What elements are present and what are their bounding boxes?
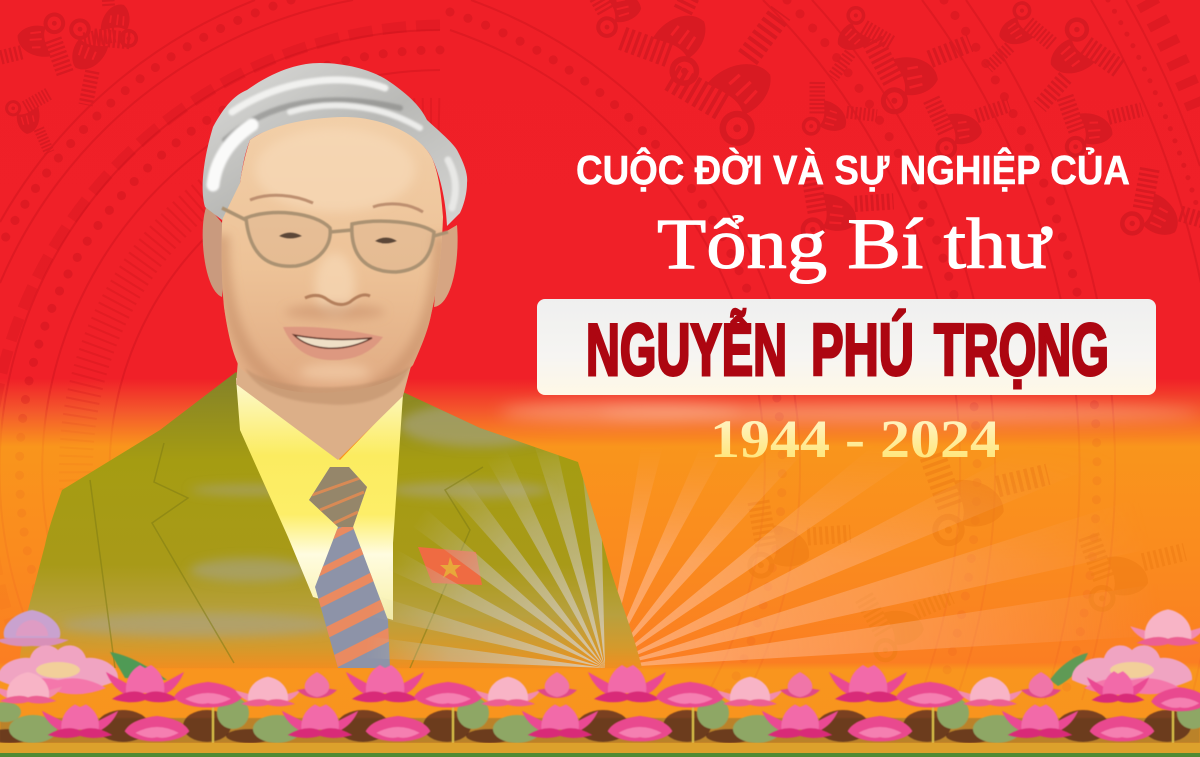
- glasses: [222, 208, 448, 272]
- eyebrows: [250, 195, 423, 212]
- years: 1944 - 2024: [710, 409, 1000, 469]
- neck: [236, 355, 414, 460]
- lapels: [90, 443, 483, 668]
- bottom green band: [0, 753, 1200, 757]
- nose: [305, 295, 370, 305]
- name plate: [537, 299, 1156, 395]
- bird motifs on red: [0, 0, 1200, 273]
- face shading: [222, 128, 440, 395]
- suit: [18, 372, 642, 668]
- portrait: [18, 63, 642, 686]
- bottom gold band: [0, 743, 1200, 753]
- sun rays over portrait: [384, 448, 605, 668]
- hair: [203, 63, 467, 226]
- hair strands: [213, 80, 455, 208]
- stems and leaves: [0, 652, 1200, 743]
- chin crease: [245, 366, 410, 405]
- bird motifs on orange: [726, 435, 1185, 670]
- ears: [203, 205, 228, 297]
- name: [586, 310, 1109, 391]
- sun rays right: [618, 464, 1113, 666]
- large pale flowers: [0, 609, 1200, 704]
- lower row flowers: [42, 704, 1154, 741]
- flag pin: [418, 547, 482, 585]
- mouth: [283, 327, 383, 360]
- name: TRỌNG: [934, 310, 1109, 391]
- upper row flowers: [106, 665, 1200, 711]
- orange haze: [500, 402, 1200, 422]
- heading line 1: CUỘC ĐỜI VÀ SỰ NGHIỆP CỦA: [576, 147, 1130, 193]
- lotus garden: [0, 609, 1200, 743]
- name: PHÚ: [811, 310, 914, 391]
- heading line 2: Tổng Bí thư: [657, 204, 1052, 284]
- necktie: [309, 467, 390, 668]
- face: [222, 115, 443, 393]
- name: NGUYỄN: [586, 310, 787, 391]
- shirt: [236, 378, 403, 620]
- eyes: [279, 232, 397, 244]
- suit grey tint: [60, 403, 560, 637]
- facial features: [222, 195, 448, 360]
